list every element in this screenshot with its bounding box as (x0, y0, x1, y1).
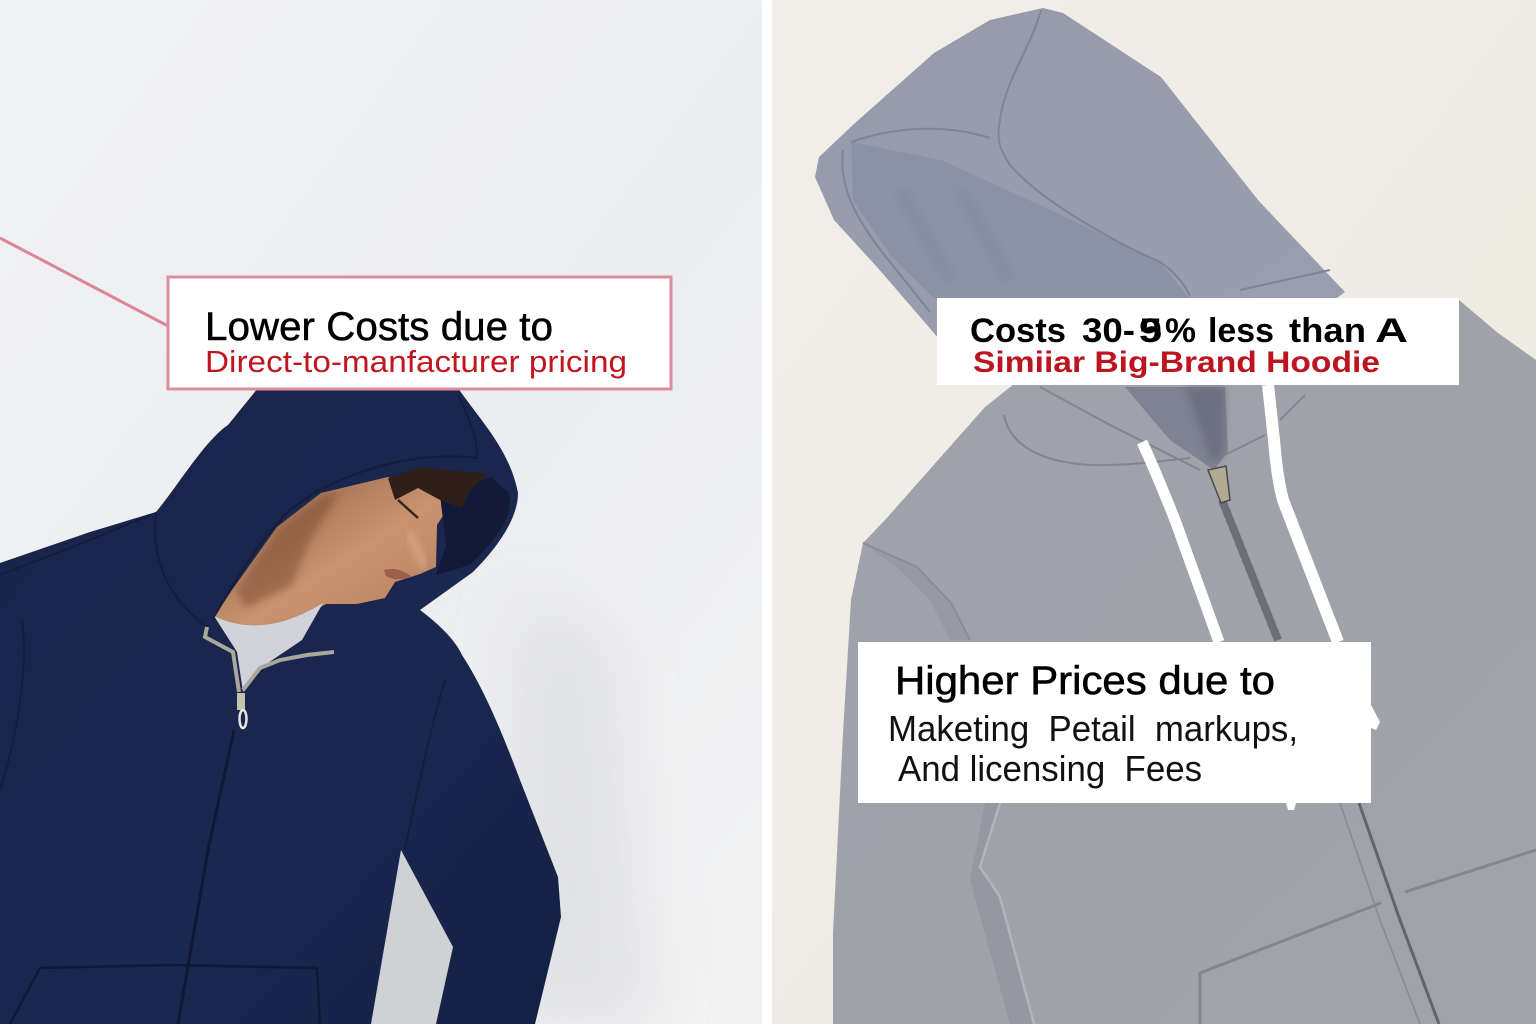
hood interior folds (900, 190, 1010, 280)
callout subtext: Simiiar Big-Brand Hoodie (973, 346, 1380, 379)
callout line one: Maketing Petail markups, (888, 708, 1298, 749)
hood outer (815, 8, 1345, 340)
callout pointer line (0, 238, 168, 326)
hoodie body (833, 300, 1536, 1024)
callout heading: 9 (1139, 312, 1162, 350)
cream background (772, 0, 1536, 1024)
skin of face and neck (214, 477, 450, 630)
callout heading: less (1208, 312, 1274, 350)
gap shadow between body and arm (371, 850, 453, 1024)
white drip marks (1286, 705, 1380, 810)
callout heading: than (1289, 312, 1366, 350)
callout: higher prices (858, 642, 1380, 810)
callout line two: And licensing Fees (898, 748, 1202, 789)
lips (384, 569, 412, 579)
centre zip line (178, 730, 234, 1024)
neck shadow (236, 492, 340, 608)
callout heading: % (1165, 312, 1196, 350)
grey flat-lay hoodie (815, 8, 1536, 1024)
callout heading (970, 312, 1408, 350)
hood interior shadow (436, 477, 510, 575)
callout subtext: Direct-to-manfacturer pricing (205, 344, 627, 379)
callout: costs less (937, 298, 1459, 385)
hood flaps at neck (1004, 387, 1305, 470)
callout heading: 5 (1139, 312, 1162, 350)
callout heading: 30- (1082, 312, 1135, 350)
callout heading: Higher Prices due to (895, 659, 1275, 703)
right drawstring (1268, 385, 1338, 642)
callout: lower costs (168, 277, 671, 389)
hair (388, 467, 488, 508)
callout heading: Lower Costs due to (205, 305, 553, 349)
zipper slider (1208, 466, 1230, 503)
pocket edges (10, 965, 320, 1024)
zipper band upper (1222, 500, 1278, 640)
zipper teeth (205, 627, 334, 692)
callout heading: A (1375, 312, 1408, 350)
wall background (0, 0, 762, 1024)
callout heading: Costs (970, 312, 1066, 350)
wall shadow (518, 632, 641, 1022)
hood seam and shoulder seams (0, 395, 477, 850)
t-shirt (214, 603, 323, 692)
left drawstring (1142, 442, 1219, 642)
hoodie body (0, 388, 561, 1024)
zipper pull (237, 693, 246, 728)
panel: grey hoodie, higher price (772, 0, 1536, 1024)
hood seams (842, 10, 1330, 312)
nose highlight (410, 535, 424, 565)
pocket seam (1200, 850, 1536, 1024)
placket edge (1340, 803, 1420, 1024)
panel: navy hoodie, lower cost (0, 0, 762, 1024)
navy hoodie on model (0, 388, 561, 1024)
neck interior shadow (1125, 387, 1228, 470)
closed eye (398, 500, 418, 518)
arm fold shadow (869, 547, 968, 640)
hood interior (851, 142, 1190, 300)
zipper band lower (1359, 803, 1439, 1024)
